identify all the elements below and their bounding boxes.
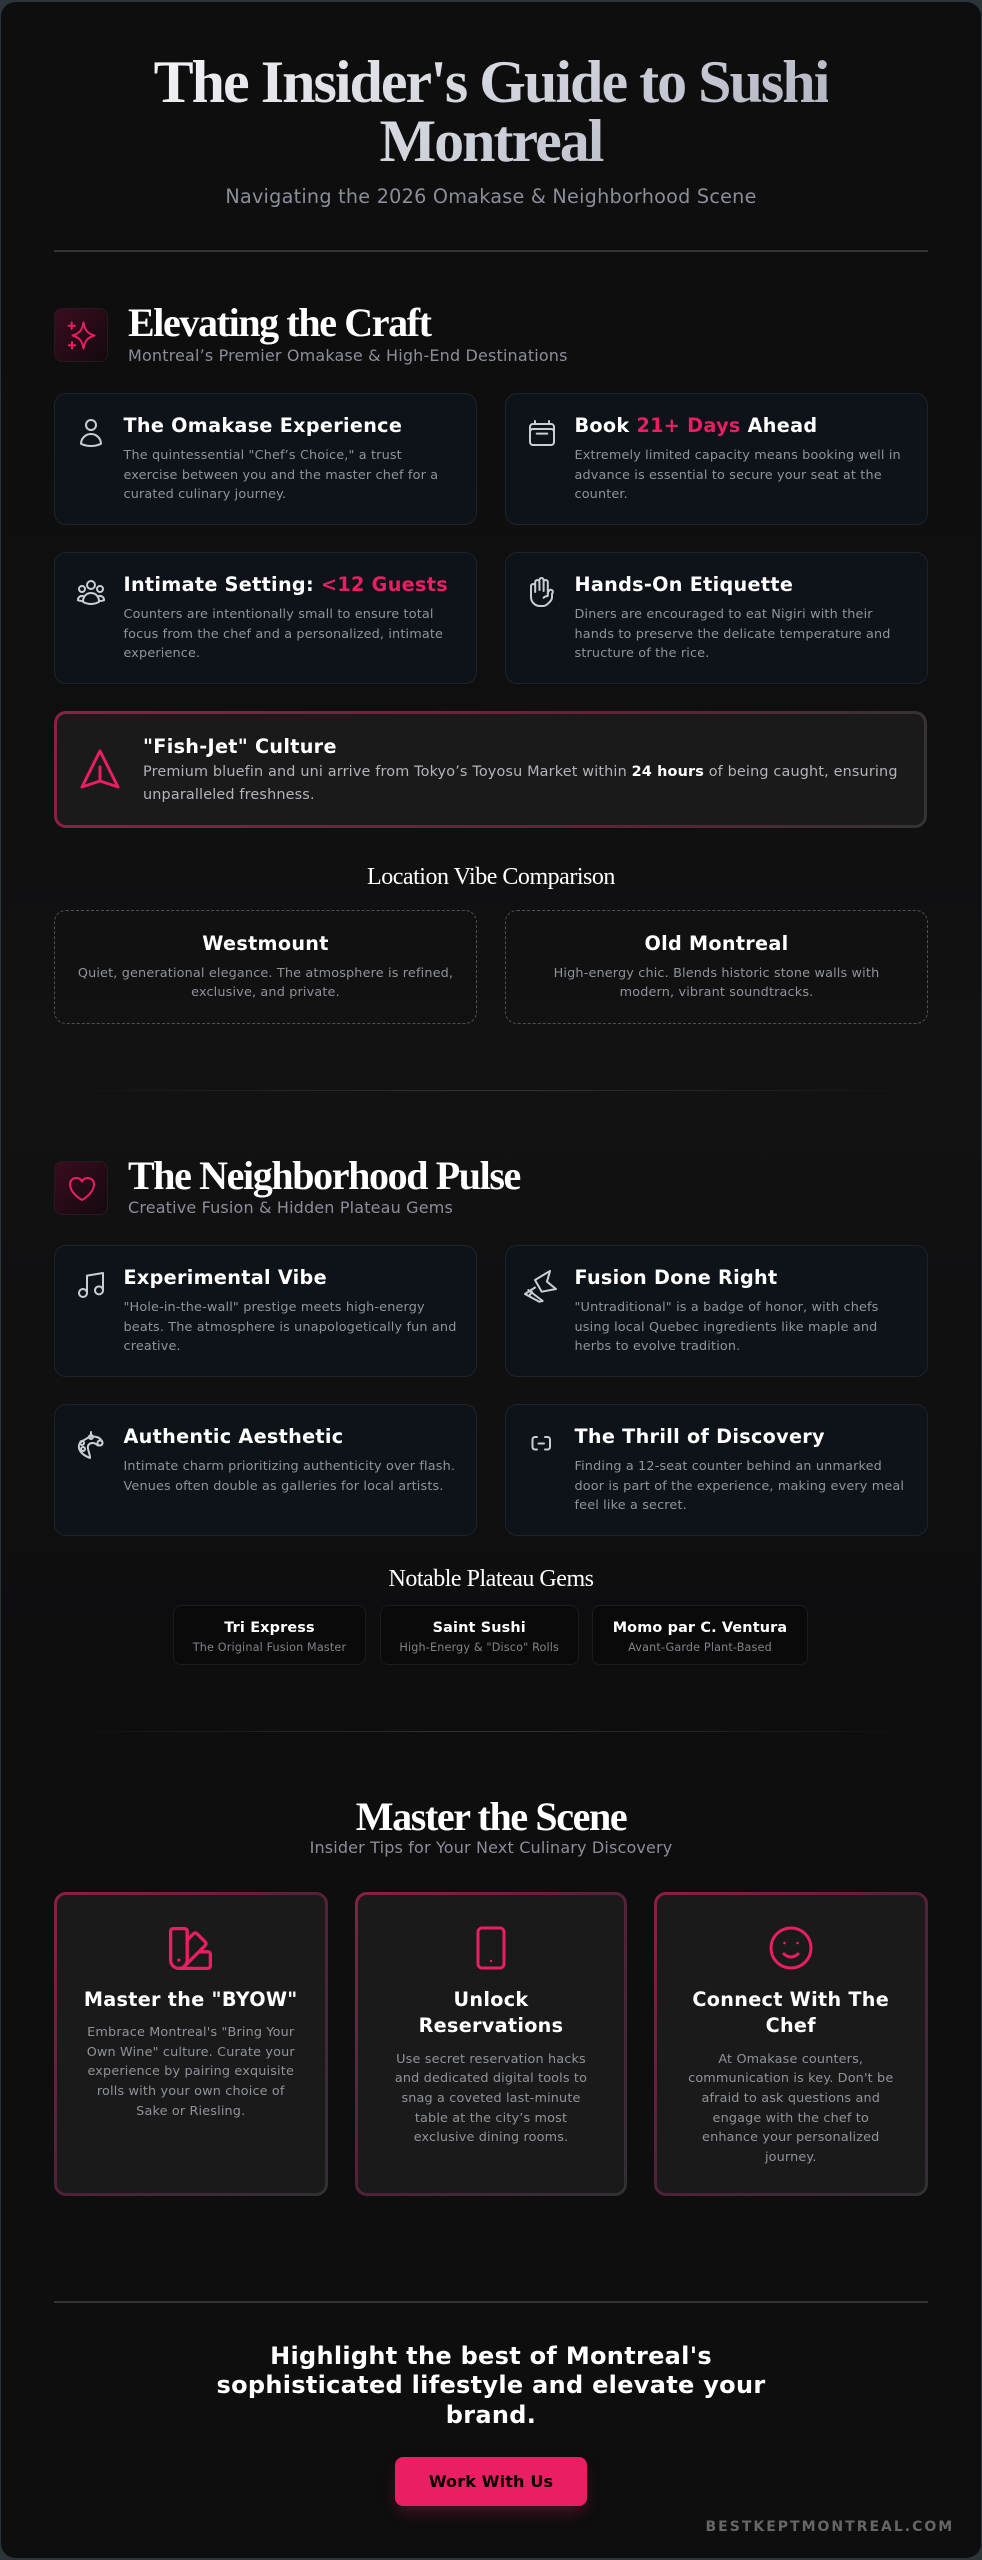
card: Book 21+ Days Ahead bbox=[505, 393, 928, 525]
card: Fusion Done Right bbox=[505, 1245, 928, 1377]
gem: Momo par C. Ventura: Avant-Garde Plant-Based bbox=[628, 1640, 772, 1654]
vibe text: Quiet, generational elegance. The atmosphere is refined, bbox=[78, 966, 453, 980]
icon: phone bbox=[476, 1926, 506, 1970]
section subtitle: Insider Tips for Your Next Culinary Discovery bbox=[310, 1838, 672, 1857]
tip title: Unlock bbox=[454, 1988, 528, 2010]
tip card: Unlock Reservations bbox=[355, 1892, 627, 2196]
watermark: BESTKEPTMONTREAL.COM bbox=[706, 2519, 954, 2535]
card text: counter. bbox=[574, 487, 628, 502]
card: The Thrill of Discovery bbox=[505, 1404, 928, 1536]
card text: experience. bbox=[124, 646, 200, 661]
icon: sparkles bbox=[54, 308, 108, 362]
card title: The Omakase Experience bbox=[124, 414, 402, 437]
tip text: Use secret reservation hacks bbox=[396, 2052, 586, 2067]
heading: Elevating the Craft bbox=[128, 300, 431, 345]
tip title bbox=[419, 1988, 563, 2037]
gem: Saint Sushi: High-Energy & "Disco" Rolls bbox=[399, 1640, 559, 1654]
tip title: Master the "BYOW" bbox=[84, 1988, 298, 2010]
tip text: journey. bbox=[765, 2150, 817, 2165]
icon: heart bbox=[54, 1161, 108, 1215]
callout text bbox=[143, 764, 898, 802]
card text: The quintessential "Chef’s Choice," a trust bbox=[124, 448, 402, 463]
card text: curated culinary journey. bbox=[124, 487, 286, 502]
icon: user group bbox=[77, 580, 105, 605]
button: Work With Us bbox=[395, 2457, 587, 2506]
card text bbox=[574, 1300, 878, 1354]
card title: Experimental Vibe bbox=[124, 1266, 327, 1289]
tip text bbox=[688, 2052, 893, 2165]
card text: Counters are intentionally small to ensure total bbox=[124, 607, 434, 622]
tip text: enhance your personalized bbox=[702, 2130, 879, 2145]
card text bbox=[124, 1459, 455, 1494]
card text: Intimate charm prioritizing authenticity over flash. bbox=[124, 1459, 455, 1474]
card text: Diners are encouraged to eat Nigiri with their bbox=[574, 607, 873, 622]
card text bbox=[123, 448, 438, 502]
tip text bbox=[395, 2052, 587, 2145]
card: Authentic Aesthetic bbox=[54, 1404, 477, 1536]
card title: Hands-On Etiquette bbox=[574, 572, 793, 596]
tip title bbox=[692, 1988, 889, 2037]
card text: "Hole-in-the-wall" prestige meets high-energy bbox=[124, 1300, 425, 1315]
tip text bbox=[87, 2025, 295, 2119]
tip text: afraid to ask questions and bbox=[701, 2091, 880, 2106]
card text: structure of the rice. bbox=[574, 646, 709, 661]
card text: beats. The atmosphere is unapologetically fun and bbox=[124, 1320, 456, 1335]
heading: Location Vibe Comparison: Location Vibe Comparison bbox=[367, 864, 615, 890]
button: Work With Us: Work With Us bbox=[429, 2472, 553, 2491]
card title: The Thrill of Discovery bbox=[574, 1425, 825, 1448]
card text: hands to preserve the delicate temperature and bbox=[574, 627, 891, 642]
icon: brackets bbox=[532, 1436, 551, 1450]
callout: Fish-Jet Culture bbox=[54, 711, 927, 828]
callout text: Premium bluefin and uni arrive from Tokyo’s Toyosu Market within 24 hours of being caught, ensuring bbox=[143, 764, 898, 780]
card text: focus from the chef and a personalized, intimate bbox=[124, 627, 443, 642]
tip text: snag a coveted last-minute bbox=[401, 2091, 581, 2106]
vibe text bbox=[78, 966, 453, 1000]
card text bbox=[124, 607, 443, 661]
card text: exercise between you and the master chef for a bbox=[124, 468, 438, 483]
title: Montreal bbox=[379, 108, 602, 174]
icon: user bbox=[80, 419, 102, 447]
vibe text bbox=[554, 966, 879, 1000]
tip text: Embrace Montreal's "Bring Your bbox=[87, 2025, 294, 2040]
subtitle: Navigating the 2026 Omakase & Neighborhood Scene bbox=[225, 185, 757, 208]
gem: Tri Express: Tri Express bbox=[224, 1620, 315, 1636]
icon: palette bbox=[78, 1431, 104, 1459]
icon: music note bbox=[78, 1272, 104, 1298]
card text: creative. bbox=[124, 1339, 181, 1354]
card text bbox=[574, 1459, 904, 1513]
tip text: engage with the chef to bbox=[713, 2111, 869, 2126]
vibe title: Westmount bbox=[202, 932, 329, 954]
call to action text: sophisticated lifestyle and elevate your bbox=[216, 2371, 766, 2399]
tip text: experience by pairing exquisite bbox=[88, 2064, 294, 2079]
icon: hand bbox=[530, 577, 554, 607]
card text bbox=[574, 448, 901, 502]
card text: Finding a 12-seat counter behind an unmarked bbox=[574, 1459, 882, 1474]
card: Hands-On Etiquette bbox=[505, 552, 928, 684]
call to action text: brand. bbox=[446, 2401, 536, 2429]
heading: Master the Scene: Master the Scene bbox=[356, 1794, 626, 1838]
tip text: table at the city’s most bbox=[415, 2111, 567, 2126]
gem: Saint Sushi: Saint Sushi bbox=[433, 1620, 526, 1636]
tip text: Sake or Riesling. bbox=[136, 2104, 245, 2119]
gem: Momo par C. Ventura bbox=[592, 1605, 808, 1665]
card text: advance is essential to secure your seat at the bbox=[574, 468, 882, 483]
icon: smile bbox=[770, 1926, 812, 1970]
callout title: "Fish-Jet" Culture bbox=[143, 734, 337, 758]
tip text: At Omakase counters, bbox=[718, 2052, 863, 2067]
icon: swatch bbox=[168, 1927, 212, 1970]
tip text: rolls with your own choice of bbox=[97, 2084, 285, 2099]
call to action text bbox=[216, 2342, 766, 2429]
card text: "Untraditional" is a badge of honor, with chefs bbox=[574, 1300, 878, 1315]
section subtitle: Montreal’s Premier Omakase & High-End Destinations bbox=[128, 346, 568, 364]
section subtitle: Creative Fusion & Hidden Plateau Gems bbox=[128, 1198, 453, 1216]
card: Old Montreal bbox=[505, 910, 928, 1024]
vibe text: High-energy chic. Blends historic stone walls with bbox=[554, 966, 879, 980]
card text: door is part of the experience, making every meal bbox=[574, 1479, 904, 1494]
section header: The Neighborhood Pulse bbox=[54, 1152, 520, 1216]
icon: megaphone brush bbox=[524, 1270, 557, 1303]
card: Westmount bbox=[54, 910, 477, 1024]
vibe text: modern, vibrant soundtracks. bbox=[620, 985, 813, 1000]
vibe text: exclusive, and private. bbox=[191, 985, 340, 1000]
card title: Intimate Setting: <12 Guests bbox=[124, 572, 448, 596]
card text bbox=[574, 607, 891, 661]
heading: The Neighborhood Pulse bbox=[128, 1152, 520, 1198]
icon: paper plane bbox=[80, 749, 120, 788]
tip text: and dedicated digital tools to bbox=[395, 2071, 587, 2086]
tip text: exclusive dining rooms. bbox=[414, 2130, 568, 2145]
section header: Elevating the Craft bbox=[54, 300, 568, 364]
card: The Omakase Experience bbox=[54, 393, 477, 525]
title: The Insider's Guide to Sushi bbox=[154, 49, 828, 115]
card text bbox=[124, 1300, 456, 1354]
gem: Tri Express bbox=[173, 1605, 366, 1665]
tip title: Chef bbox=[766, 2014, 816, 2037]
gem: Tri Express: The Original Fusion Master bbox=[193, 1640, 346, 1654]
card text: feel like a secret. bbox=[574, 1498, 687, 1513]
tip title: Connect With The bbox=[692, 1988, 889, 2010]
card: Experimental Vibe bbox=[54, 1245, 477, 1377]
tip text: Own Wine" culture. Curate your bbox=[87, 2045, 295, 2060]
tip text: communication is key. Don't be bbox=[688, 2071, 893, 2086]
card title: Book 21+ Days Ahead bbox=[574, 414, 817, 437]
card text: Extremely limited capacity means booking well in bbox=[574, 448, 901, 463]
card text: Venues often double as galleries for local artists. bbox=[124, 1479, 444, 1494]
card text: using local Quebec ingredients like maple and bbox=[574, 1320, 877, 1335]
tip title: Reservations bbox=[419, 2014, 563, 2037]
tip card: Connect With The Chef bbox=[654, 1892, 928, 2196]
heading: Notable Plateau Gems: Notable Plateau Gems bbox=[388, 1566, 594, 1592]
card title: Authentic Aesthetic bbox=[124, 1425, 343, 1448]
card text: herbs to evolve tradition. bbox=[574, 1339, 740, 1354]
vibe title: Old Montreal bbox=[644, 932, 788, 954]
call to action text: Highlight the best of Montreal's bbox=[270, 2342, 712, 2370]
gem: Momo par C. Ventura: Momo par C. Ventura bbox=[613, 1620, 787, 1636]
tip card: BYOW bbox=[54, 1892, 328, 2196]
callout text: unparalleled freshness. bbox=[143, 786, 315, 802]
icon: calendar bbox=[529, 420, 555, 446]
card: Intimate Setting bbox=[54, 552, 477, 684]
card title: Fusion Done Right bbox=[574, 1266, 777, 1289]
title bbox=[154, 49, 828, 174]
gem: Saint Sushi bbox=[380, 1605, 579, 1665]
